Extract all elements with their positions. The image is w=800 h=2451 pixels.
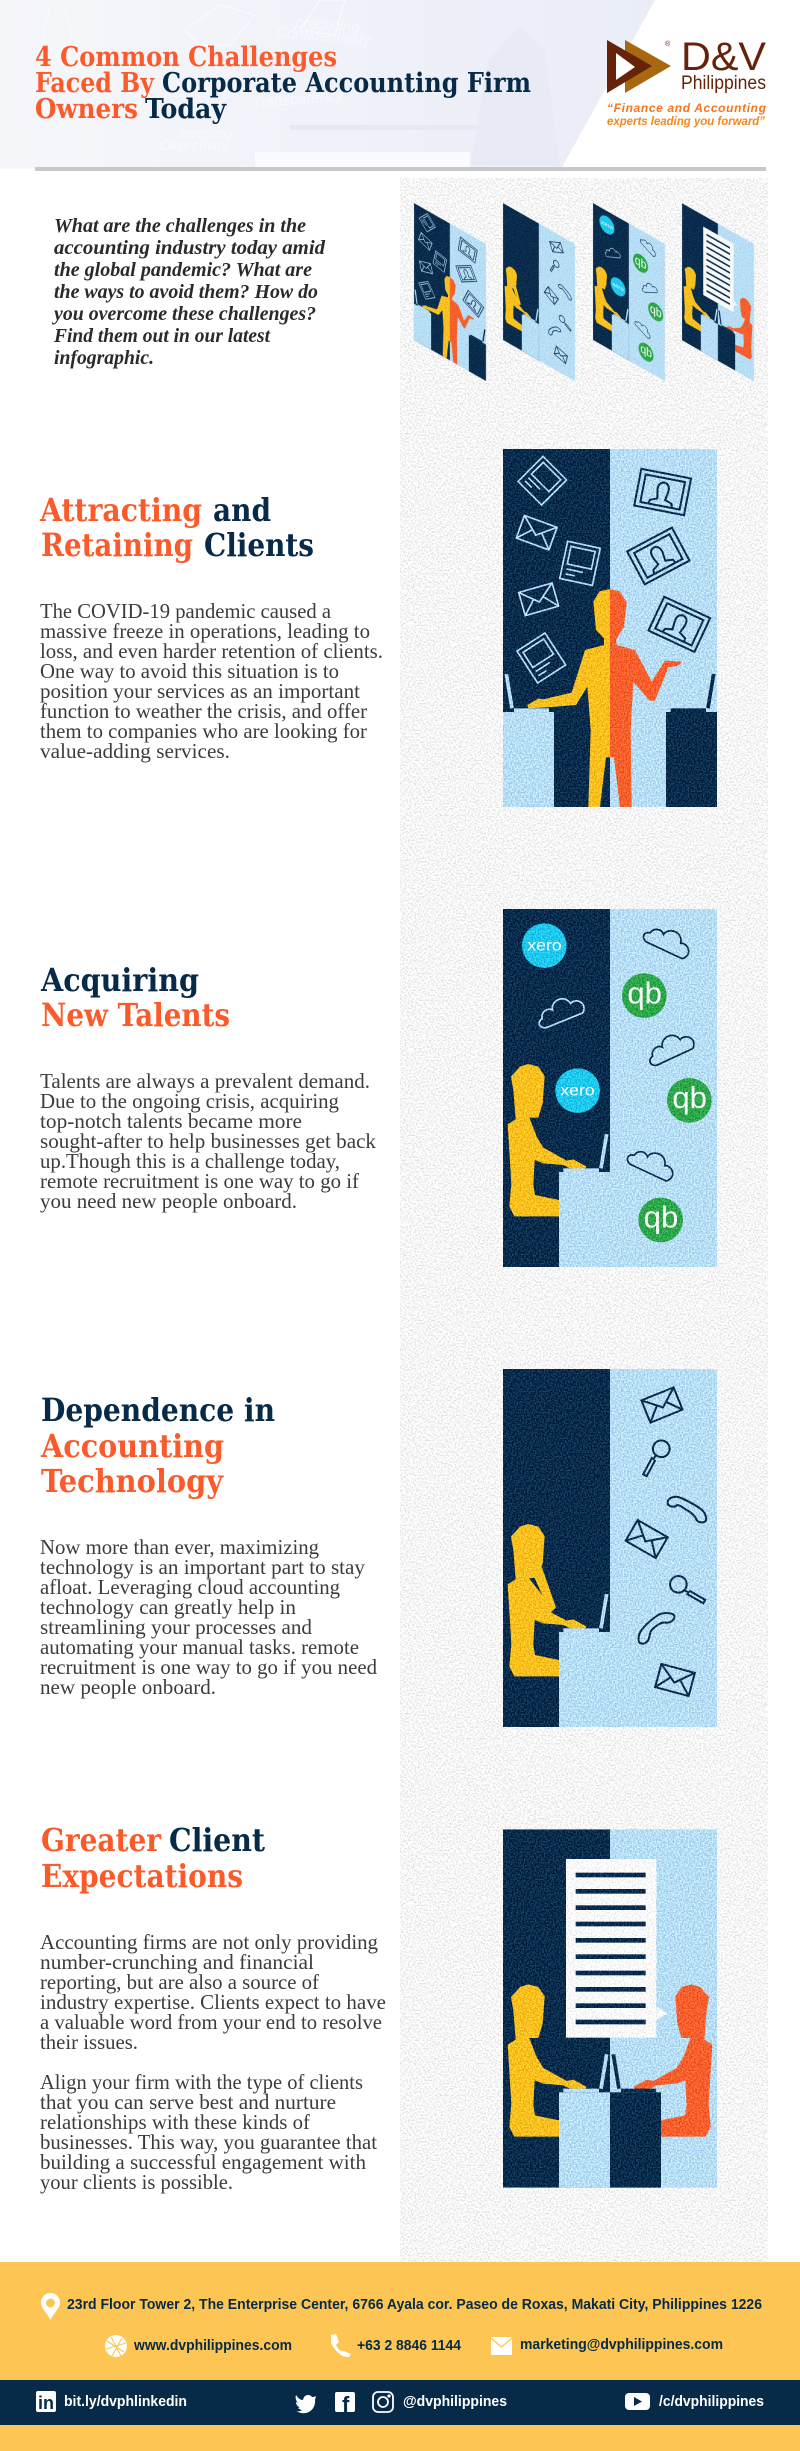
title [35,42,531,125]
body text: attracting and retaining clients: them to companies who are looking for [40,719,367,743]
title: Faced By [35,68,155,99]
heading: acquiring new talents: New Talents [41,996,230,1034]
intro text: accounting industry today amid [54,237,326,259]
body text: attracting and retaining clients: The COVID-19 pandemic caused a [40,599,332,623]
body text: greater client expectations: businesses. This way, you guarantee that [40,2130,377,2154]
body text: greater client expectations: a valuable word from your end to resolve [40,2010,382,2034]
header banner background: keeping [180,125,233,142]
icon: globe [105,2335,127,2357]
icon: location pin [41,2293,60,2320]
icon: xero logos [522,923,600,1113]
body text: greater client expectations: relationships with these kinds of [40,2110,310,2134]
heading: attracting and retaining clients [39,491,314,564]
body text: greater client expectations: reporting, but are also a source of [40,1970,319,1994]
heading: dependence in accounting technology: Technology [41,1462,224,1500]
footer: social media band [0,2380,800,2425]
figure: orange person [633,1984,712,2137]
heading: dependence in accounting technology [40,1391,275,1500]
icon: facebook [335,2392,355,2417]
icons: clouds [533,920,696,1182]
thumbnail: attracting clients isometric panel [414,203,486,381]
body text: dependence in accounting technology: streamlining your processes and [40,1615,312,1639]
title: 4 Common Challenges [35,42,337,73]
icon: phone [331,2334,351,2357]
header banner background: practicing [294,14,361,37]
figure: seated yellow person with phone [508,1524,587,1676]
panel: greater client expectations illustration [503,1829,717,2188]
intro text: Find them out in our latest [53,325,271,347]
body text: attracting and retaining clients: massive freeze in operations, leading to [40,619,370,643]
body text: acquiring new talents: you need new people onboard. [40,1189,297,1213]
icon: twitter [296,2395,316,2413]
logo: D&V Philippines: D&V [681,35,766,79]
body text: greater client expectations: their issues. [40,2030,138,2054]
icons: documents and mail on dark side [516,456,600,683]
intro text [52,215,326,369]
body text: dependence in accounting technology: new people onboard. [40,1675,216,1699]
icon: xero logos: xero [560,1082,595,1099]
intro text: What are the challenges in the [54,215,306,237]
figure: seated yellow person [508,1064,587,1216]
body text: acquiring new talents [40,1069,376,1213]
logo: D&V Philippines: Philippines [681,73,766,94]
heading: acquiring new talents [40,961,230,1034]
figure: half orange person [610,589,682,807]
logo: D&V Philippines: ® [665,40,671,48]
panel: attracting and retaining clients illustration [503,449,717,807]
icon: facebook: f [342,2392,350,2417]
body text: greater client expectations: industry expertise. Clients expect to have [40,1990,386,2014]
icons: mail, search and phone [626,1387,709,1696]
body text: attracting and retaining clients [40,599,383,763]
icon: quickbooks logos: qb [627,976,662,1010]
title: Corporate Accounting Firm [162,68,531,99]
body text: attracting and retaining clients: function to weather the crisis, and offer [40,699,367,723]
body text: greater client expectations: Align your firm with the type of clients [40,2070,363,2094]
body text: acquiring new talents: top-notch talents became more [40,1109,302,1133]
thumbnail: accounting technology isometric panel [503,203,575,381]
heading: greater client expectations: Expectations [41,1857,243,1895]
body text: greater client expectations: building a successful engagement with [40,2150,366,2174]
body text: dependence in accounting technology: Now more than ever, maximizing [40,1535,319,1559]
desk and laptops [559,2054,661,2188]
heading: attracting and retaining clients: Clients [204,526,314,564]
intro text: you overcome these challenges? [52,303,316,325]
thumbnail: new talents isometric panel [593,203,665,381]
heading: greater client expectations [41,1821,266,1895]
icon: instagram [373,2392,393,2412]
linkedin handle: bit.ly/dvphlinkedin [64,2394,187,2410]
heading: attracting and retaining clients: Attracting [39,491,202,529]
body text: attracting and retaining clients: position your services as an important [40,679,360,703]
icon: quickbooks logos: qb [672,1081,707,1115]
desks and laptops [503,674,717,807]
body text: acquiring new talents: Due to the ongoing crisis, acquiring [40,1089,339,1113]
body text: dependence in accounting technology: automating your manual tasks. remote [40,1635,359,1659]
heading: attracting and retaining clients: and [213,491,271,529]
logo: D&V Philippines: experts leading you forward” [607,114,765,128]
body text: greater client expectations: Accounting firms are not only providing [40,1930,378,1954]
speckled background column [400,178,768,2262]
body text: greater client expectations: your clients is possible. [40,2170,233,2194]
title: Today [145,94,227,125]
figure: yellow person [508,1984,587,2137]
desk and laptop [559,1594,610,1727]
body text: greater client expectations [40,1930,386,2194]
icon: linkedin: in [38,2393,54,2413]
header banner background: Transparency [252,87,345,112]
body text: dependence in accounting technology: technology can greatly help in [40,1595,296,1619]
body text: greater client expectations: that you can serve best and nurture [40,2090,336,2114]
speech bubble document [566,1859,667,2038]
phone number: +63 2 8846 1144 [357,2338,461,2354]
footer: contact band [0,2262,800,2451]
heading: dependence in accounting technology: Dependence in [41,1391,275,1429]
panel: acquiring new talents illustration [503,909,717,1267]
header banner background: Confidentiality [276,24,372,49]
header banner background [0,0,655,169]
icon: quickbooks logos [622,973,712,1242]
heading: attracting and retaining clients: Retaining [41,526,193,564]
body text: dependence in accounting technology [40,1535,377,1699]
address: 23rd Floor Tower 2, The Enterprise Center, 6766 Ayala cor. Paseo de Roxas, Makati City, Philippines 1226 [67,2297,762,2313]
icon: envelope [491,2337,512,2355]
desk and laptop [559,1134,610,1267]
header banner background: Objectivity [160,137,231,154]
icon: xero logos: xero [527,937,562,954]
body text: attracting and retaining clients: One way to avoid this situation is to [40,659,339,683]
body text: acquiring new talents: sought-after to help businesses get back [40,1129,376,1153]
heading: acquiring new talents: Acquiring [40,961,199,999]
heading: dependence in accounting technology: Accounting [40,1427,224,1465]
icons: client profile frames [627,469,710,652]
intro text: infographic. [54,347,154,369]
logo: D&V Philippines: “Finance and Accounting [607,101,767,115]
body text: acquiring new talents: up.Though this is a challenge today, [40,1149,340,1173]
title: Owners [35,94,138,125]
body text: greater client expectations: number-crunching and financial [40,1950,314,1974]
email: marketing@dvphilippines.com [520,2337,723,2353]
header divider line [35,167,766,171]
social handle: @dvphilippines [403,2394,507,2410]
body text: dependence in accounting technology: afloat. Leveraging cloud accounting [40,1575,340,1599]
logo: D&V Philippines [607,35,767,128]
body text: acquiring new talents: Talents are always a prevalent demand. [40,1069,370,1093]
icon: quickbooks logos: qb [644,1201,678,1235]
body text: dependence in accounting technology: technology is an important part to stay [40,1555,365,1579]
panel: dependence in accounting technology illustration [503,1369,717,1727]
body text: dependence in accounting technology: recruitment is one way to go if you need [40,1655,377,1679]
heading: greater client expectations: Client [169,1821,266,1859]
website: www.dvphilippines.com [133,2338,292,2354]
youtube handle: /c/dvphilippines [659,2394,764,2410]
body text: acquiring new talents: remote recruitment is one way to go if [40,1169,359,1193]
icon: youtube [625,2393,650,2410]
body text: attracting and retaining clients: loss, and even harder retention of clients. [40,639,383,663]
body text: attracting and retaining clients: value-adding services. [40,739,230,763]
intro text: the global pandemic? What are [54,259,312,281]
figure: half yellow person [527,589,610,807]
thumbnail: client expectations isometric panel [682,203,754,381]
intro text: the ways to avoid them? How do [54,281,318,303]
heading: greater client expectations: Greater [41,1821,162,1859]
